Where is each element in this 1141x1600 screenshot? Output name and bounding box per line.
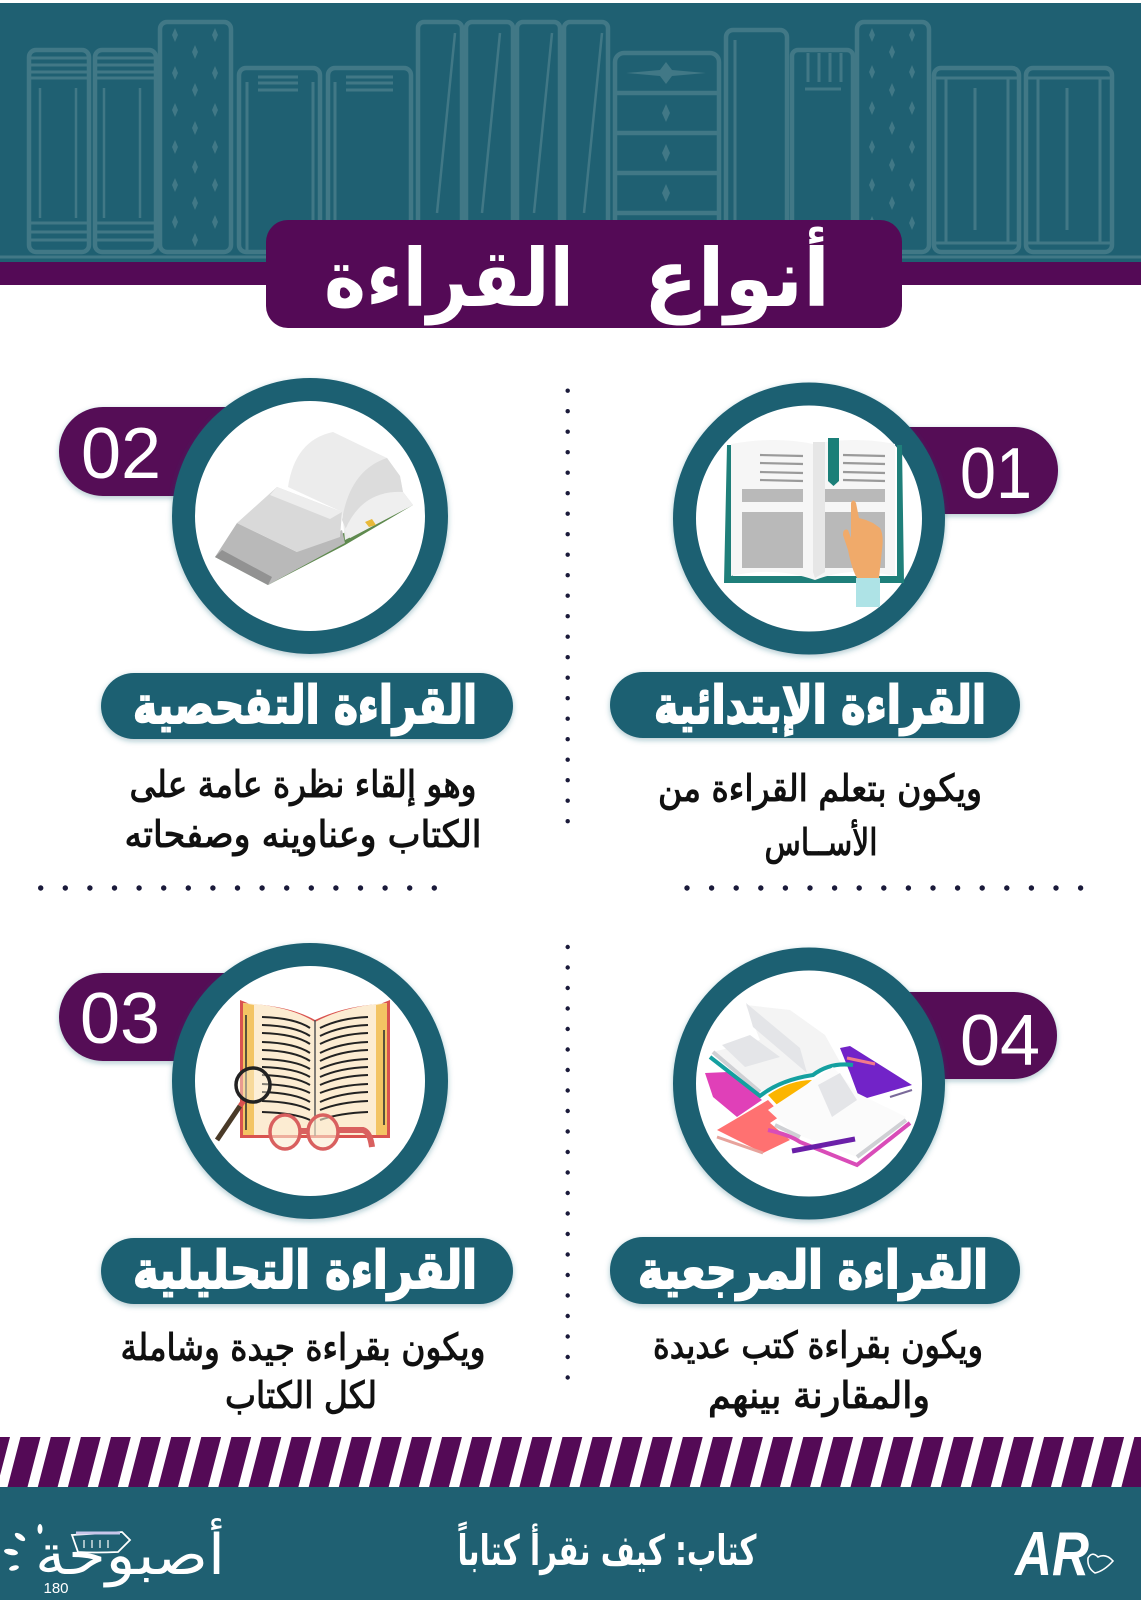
heading pill 02: القراءة التفحصية: [133, 676, 477, 736]
number badge 01: 01: [960, 434, 1032, 514]
heading pill 01: القراءة الإبتدائية: [654, 676, 986, 736]
description 02: وهو إلقاء نظرة عامة على: [130, 763, 476, 806]
dotted dividers: [38, 388, 1083, 1380]
description 01: ويكون بتعلم القراءة من: [658, 767, 982, 810]
heading pill 04: القراءة المرجعية: [638, 1241, 988, 1301]
number badge 03: [59, 973, 269, 1061]
icon: open book with pointing hand: [684, 394, 934, 643]
panel: type 01: [610, 394, 1058, 864]
heading pill 03: القراءة التحليلية: [133, 1241, 477, 1301]
description 03: لكل الكتاب: [225, 1374, 377, 1417]
logo: Osbouha 180: أصبوحة: [35, 1518, 225, 1588]
icon: pile of open books: [684, 959, 934, 1208]
panel: type 02: [59, 390, 513, 856]
logo: Osbouha 180: 180: [43, 1580, 69, 1597]
number badge 04: 04: [960, 1001, 1040, 1081]
description 02: الكتاب وعناوينه وصفحاته: [124, 813, 482, 856]
number badge 04: [860, 992, 1057, 1081]
striped band: [0, 1437, 1141, 1487]
description 02: [124, 763, 482, 856]
footer: [0, 1487, 1141, 1600]
panel: type 04: [610, 959, 1057, 1417]
number badge 02: 02: [81, 414, 161, 494]
title: أنواع: [644, 227, 830, 326]
title: [266, 220, 902, 328]
description 03: ويكون بقراءة جيدة وشاملة: [120, 1326, 486, 1369]
number badge 03: 03: [80, 979, 160, 1059]
title: القراءة: [324, 232, 574, 326]
icon: book, magnifier and glasses: [184, 954, 436, 1208]
footer book title: كتاب: كيف نقرأ كتاباً: [458, 1521, 757, 1576]
description 04: ويكون بقراءة كتب عديدة: [653, 1324, 983, 1367]
description 04: [653, 1324, 983, 1417]
number badge 01: [860, 427, 1058, 514]
description 01: [658, 767, 982, 864]
icon: book with fanning pages: [184, 390, 436, 642]
number badge 02: [59, 407, 269, 496]
logo: Osbouha 180: [4, 1518, 225, 1597]
panel: type 03: [59, 954, 513, 1417]
description 04: والمقارنة بينهم: [708, 1374, 930, 1417]
description 03: [120, 1326, 486, 1417]
bookshelf illustration: [0, 22, 1141, 257]
logo: AR heart: AR: [1013, 1520, 1089, 1589]
header banner: [0, 3, 1141, 285]
description 01: الأســاس: [764, 819, 878, 864]
